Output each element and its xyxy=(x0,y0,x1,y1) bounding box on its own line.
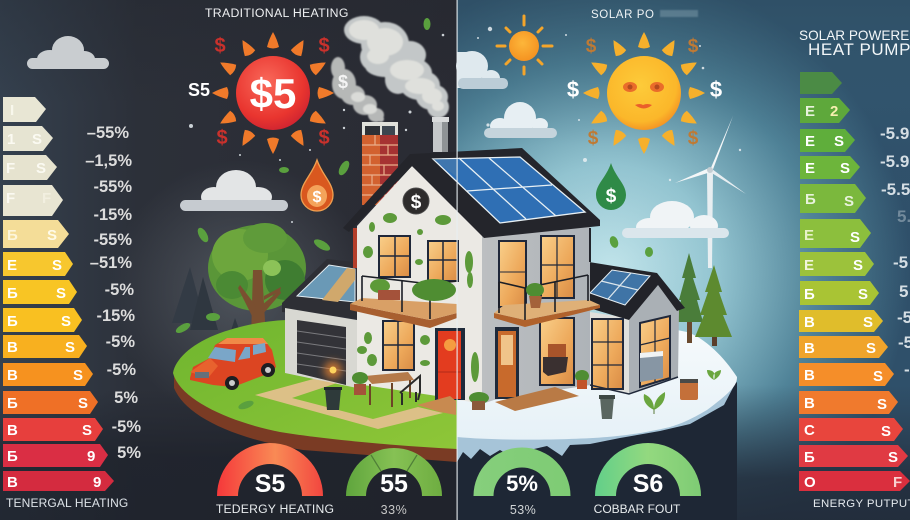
energy rating bars: solar heat pump xyxy=(799,72,910,491)
house: grey wall right xyxy=(482,224,590,404)
bar 7 xyxy=(3,280,77,304)
title: solar powered heat pump xyxy=(799,28,910,59)
car xyxy=(190,338,276,390)
gauge label: traditional: TEDERGY HEATING xyxy=(216,502,334,516)
cloud: right top xyxy=(456,51,508,89)
gauge value: solar left: 53% xyxy=(510,503,536,517)
pot by window xyxy=(575,370,589,389)
brown dollar marks: $ xyxy=(688,36,699,57)
cloud: right lower xyxy=(622,201,729,238)
bar 8: Б xyxy=(804,286,815,303)
percentage labels: traditional: -5% xyxy=(107,361,136,379)
bar 6 xyxy=(800,219,871,248)
gauge: traditional green xyxy=(346,448,442,498)
tree: left xyxy=(208,223,306,338)
flower pot near split xyxy=(469,392,489,410)
potted plant xyxy=(352,372,368,395)
bar 12 xyxy=(799,391,898,414)
railing xyxy=(499,275,588,320)
bar 9: B xyxy=(7,339,18,356)
orange door xyxy=(495,327,519,399)
bar 2: 1 xyxy=(7,131,15,148)
gauge: traditional green: 55 xyxy=(380,470,408,498)
percentage labels: traditional: –55% xyxy=(87,124,129,142)
percentage labels: solar: -5.9 xyxy=(880,152,909,171)
dollar sign: right of sun: $ xyxy=(710,77,722,102)
drop: saving on solar side: $ xyxy=(606,186,617,207)
bar 4: S xyxy=(840,160,850,177)
bar 3: S xyxy=(834,133,844,150)
percentage labels: traditional: -5% xyxy=(112,418,141,436)
bar 6 xyxy=(3,252,73,276)
house: brick strip xyxy=(353,228,357,268)
bar 9: B xyxy=(804,314,815,331)
title: traditional heating: TRADITIONAL HEATING xyxy=(205,6,349,20)
percentage labels: traditional: -55% xyxy=(93,231,132,249)
bar 13: C xyxy=(804,422,815,439)
bar 1: I xyxy=(10,102,14,119)
brown dollar marks xyxy=(586,36,699,149)
red dollar marks: $ xyxy=(318,35,330,57)
pine trees: right xyxy=(676,253,732,346)
bar 3: E xyxy=(805,133,815,150)
bar 14 xyxy=(799,445,908,467)
bar 7: S xyxy=(853,257,863,274)
dark underside: solar island xyxy=(457,382,737,520)
bar 11: B xyxy=(804,367,815,384)
bar 12: B xyxy=(7,422,18,439)
bar 5: Б xyxy=(805,191,816,208)
label: dollar in smoke: $ xyxy=(338,72,348,92)
bar 13 xyxy=(3,444,108,467)
seedling xyxy=(707,370,721,380)
gauge: solar left xyxy=(474,447,570,496)
percentage labels: solar: 5 xyxy=(899,282,908,301)
percentage labels: traditional: –51% xyxy=(90,254,132,272)
bar 7: Б xyxy=(7,285,18,302)
trash bin xyxy=(324,387,342,410)
bar 4: E xyxy=(805,160,815,177)
bar 3: S xyxy=(36,160,46,177)
railing xyxy=(362,276,458,319)
balcony: right xyxy=(494,275,600,327)
air conditioner unit xyxy=(640,351,663,382)
percentage labels: traditional: 5% xyxy=(114,389,138,407)
bar 10: B xyxy=(804,340,815,357)
balcony: left xyxy=(350,276,458,328)
island: snow xyxy=(457,330,737,440)
bar 4: F xyxy=(42,190,51,207)
bar 4 xyxy=(3,185,63,216)
bar 7 xyxy=(800,252,874,276)
bar 8: S xyxy=(858,286,868,303)
vines on wall xyxy=(357,213,479,382)
bar 14: 9 xyxy=(93,474,101,491)
bar 11: Б xyxy=(7,395,18,412)
bar 7: S xyxy=(56,285,66,302)
window: lower left xyxy=(383,321,414,370)
bar 2: 2 xyxy=(830,103,838,120)
bar 14 xyxy=(3,471,114,491)
background: solar side xyxy=(457,0,910,520)
house: annex right xyxy=(589,262,685,394)
garage solar panels xyxy=(297,265,355,302)
island: grass xyxy=(173,320,457,449)
smoke: large plume xyxy=(344,16,449,118)
bar 9: S xyxy=(65,339,75,356)
red door xyxy=(435,328,465,400)
bar 9 xyxy=(3,335,87,358)
compost bin xyxy=(599,395,615,419)
bar 11 xyxy=(799,363,894,386)
bar 12 xyxy=(3,418,103,441)
annex window 2 xyxy=(640,316,670,387)
percentage labels: traditional: -55% xyxy=(93,178,132,196)
bar 8: Б xyxy=(7,313,18,330)
plant xyxy=(526,283,544,308)
house: garage xyxy=(282,259,357,388)
bar 2: S xyxy=(32,131,42,148)
bar 13: Б xyxy=(7,448,18,465)
window: upper right 2 xyxy=(541,236,574,298)
bar 13 xyxy=(799,418,903,441)
roof: main xyxy=(343,148,600,238)
title: solar side: SOLAR PO xyxy=(591,9,655,21)
bar 14: Б xyxy=(804,449,815,466)
bar 7: E xyxy=(804,257,814,274)
bar 11: S xyxy=(78,395,88,412)
gauge value: traditional green: 33% xyxy=(381,503,407,517)
bar 15: O xyxy=(804,474,816,491)
patio table and chair xyxy=(365,372,420,407)
bar 12: S xyxy=(82,422,92,439)
gauge label: solar right: COBBAR FOUT xyxy=(594,502,681,516)
bar 12: S xyxy=(877,396,887,413)
bar 4: F xyxy=(6,190,15,207)
red dollar marks: $ xyxy=(318,127,330,149)
drop: saving on solar side xyxy=(596,163,626,210)
floating leaves xyxy=(174,18,653,411)
cloud: left middle xyxy=(180,170,288,211)
title: solar side xyxy=(591,9,698,21)
gauge: solar right xyxy=(595,443,701,498)
label: S5: S5 xyxy=(188,80,210,100)
chimney xyxy=(362,122,398,205)
title: solar powered heat pump: HEAT PUMP xyxy=(808,40,910,59)
bar 10 xyxy=(3,363,93,386)
bar 5 xyxy=(800,184,866,213)
driveway path xyxy=(255,378,443,429)
bar 1 xyxy=(3,97,46,122)
bar 4 xyxy=(800,156,860,179)
bar 8 xyxy=(3,308,82,332)
bar 6: S xyxy=(850,229,860,246)
gauge: solar left: 5% xyxy=(506,471,538,496)
cloud: right middle xyxy=(484,102,557,138)
window: lower right xyxy=(540,318,574,385)
percentage labels: traditional: -5% xyxy=(106,333,135,351)
smoke: small plume xyxy=(331,57,384,122)
bar 11: S xyxy=(873,368,883,385)
sun: traditional cost: $5 xyxy=(250,70,296,117)
dark background trees xyxy=(172,267,243,340)
brown dollar marks: $ xyxy=(588,128,599,149)
gauge: traditional heating xyxy=(217,443,323,498)
percentage labels: solar: - xyxy=(904,360,910,379)
window: upper middle xyxy=(428,241,458,281)
gauge: traditional heating: S5 xyxy=(255,470,285,498)
dollar badge on gable: $ xyxy=(411,192,422,213)
bar 2 xyxy=(800,98,850,123)
garage glow xyxy=(324,361,342,379)
bar 3 xyxy=(3,155,57,180)
bar 11 xyxy=(3,391,98,414)
bar 8: S xyxy=(61,313,71,330)
bar 14: B xyxy=(7,474,18,491)
bar 15: F xyxy=(893,474,902,491)
percentage labels: solar: -5.9 xyxy=(880,124,909,143)
bar 13: S xyxy=(881,423,891,440)
bar 2 xyxy=(3,126,53,151)
sapling xyxy=(644,392,665,414)
island: icicles right xyxy=(457,380,736,462)
percentage labels: traditional xyxy=(85,124,141,462)
solar panel array: main roof xyxy=(433,157,585,223)
house: white gable wall xyxy=(357,166,482,404)
annex solar panel xyxy=(590,270,650,305)
background: traditional side xyxy=(0,0,457,520)
bar 5: S xyxy=(844,193,854,210)
bar 10 xyxy=(799,336,888,358)
percentage labels: traditional: -15% xyxy=(93,206,132,224)
bar 10: S xyxy=(866,340,876,357)
dollar sign: left of sun: $ xyxy=(567,77,579,102)
percentage labels: traditional: –1,5% xyxy=(85,152,132,170)
bar 2: E xyxy=(805,103,815,120)
brown dollar marks: $ xyxy=(688,128,699,149)
dollar badge on gable xyxy=(403,188,429,214)
bar 12: B xyxy=(804,395,815,412)
island: dirt base left xyxy=(174,376,457,462)
wind turbine xyxy=(675,116,746,268)
planter xyxy=(370,279,456,301)
bar 6: S xyxy=(52,257,62,274)
bar 9 xyxy=(799,310,883,332)
percentage labels: traditional: -5% xyxy=(105,281,134,299)
bar 5 xyxy=(3,220,69,248)
drop: cost on traditional side xyxy=(301,160,333,211)
bar 1 xyxy=(800,72,842,94)
annex base shadow xyxy=(590,377,678,394)
window: upper left xyxy=(379,236,410,277)
wooden steps xyxy=(417,396,456,415)
bar 6: E xyxy=(7,257,17,274)
bar 8 xyxy=(800,281,879,305)
energy rating bars: traditional heating xyxy=(3,97,114,491)
caption: traditional bars: TENERGAL HEATING xyxy=(6,496,128,510)
bar 3 xyxy=(800,129,855,152)
percentage labels: traditional: -15% xyxy=(96,307,135,325)
gauge: solar right: S6 xyxy=(633,470,663,498)
bar 13: 9 xyxy=(87,448,95,465)
bar 6: E xyxy=(804,227,814,244)
brown dollar marks: $ xyxy=(586,36,597,57)
bar 10: S xyxy=(73,367,83,384)
wooden deck xyxy=(495,387,579,411)
bar 5: S xyxy=(47,227,57,244)
garage door xyxy=(297,320,346,385)
annex window xyxy=(592,319,623,389)
cloud: top left xyxy=(27,36,109,69)
percentage labels: traditional: 5% xyxy=(117,444,141,462)
bar 9: S xyxy=(863,314,873,331)
orange bin xyxy=(680,379,698,400)
split divider xyxy=(456,0,458,520)
bar 14: S xyxy=(888,449,898,466)
percentage labels: solar xyxy=(880,124,910,379)
percentage labels: solar: -5.5 xyxy=(881,180,910,199)
red dollar marks xyxy=(214,35,330,149)
window: upper right 1 xyxy=(499,241,526,307)
sun: smiling solar xyxy=(583,32,705,154)
stars xyxy=(189,27,741,223)
bar 15 xyxy=(799,471,910,491)
metal flue xyxy=(432,117,449,152)
red dollar marks: $ xyxy=(216,127,228,149)
bar 3: F xyxy=(6,160,15,177)
drop: cost on traditional side: $ xyxy=(313,189,322,206)
sun: traditional cost xyxy=(212,32,334,154)
sun: small solar xyxy=(497,16,552,74)
gutter and downpipe xyxy=(589,228,591,262)
red dollar marks: $ xyxy=(214,35,226,57)
percentage labels: solar: -5 xyxy=(893,253,908,272)
bar 10: B xyxy=(7,367,18,384)
bar 5: Б xyxy=(7,227,18,244)
